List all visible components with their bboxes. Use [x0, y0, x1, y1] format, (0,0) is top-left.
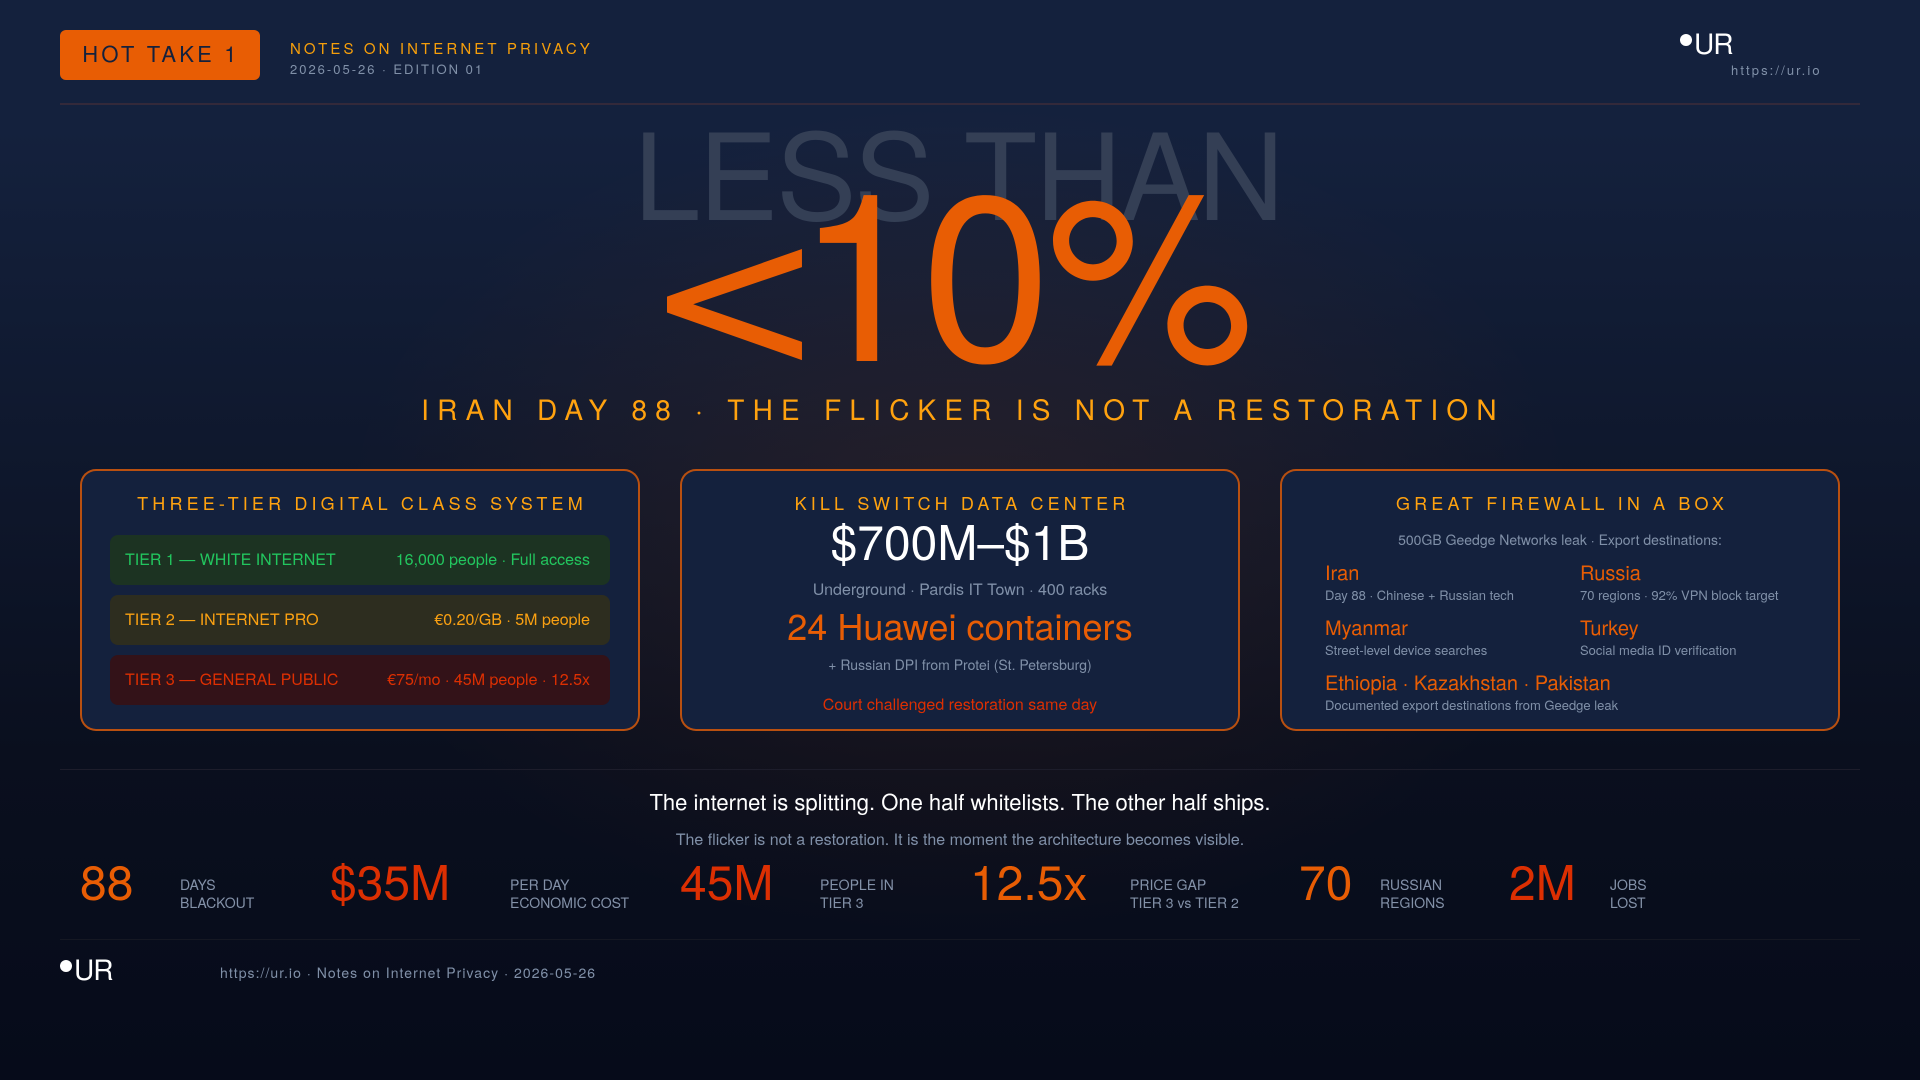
supporting line: The flicker is not a restoration. It is the moment the architecture becomes visible. [676, 827, 1244, 850]
turkey detail: Social media ID verification [1580, 640, 1737, 659]
russia detail: 70 regions · 92% VPN block target [1580, 585, 1778, 604]
country: russia: Russia [1580, 557, 1641, 586]
iran detail: Day 88 · Chinese + Russian tech [1325, 585, 1514, 604]
stat label: days blackout: DAYS [180, 874, 216, 894]
stat label: russian regions: RUSSIAN [1380, 874, 1442, 894]
hero subtitle: IRAN DAY 88 · THE FLICKER IS NOT A RESTORATION [421, 388, 1505, 428]
stat: 12.5x: 12.5x [970, 845, 1087, 914]
stat label: people in tier 3 [820, 874, 894, 912]
stat label: people in tier 3: TIER 3 [820, 892, 864, 912]
panel: three-tier digital class system [80, 469, 640, 731]
hot take badge [60, 30, 260, 80]
stat: 2M: 2M [1509, 845, 1576, 914]
country: turkey: Turkey [1580, 612, 1639, 641]
stat: $35M: $35M [330, 845, 450, 914]
tier 3 row: €75/mo · 45M people · 12.5x [387, 667, 590, 690]
stat label: price gap [1130, 874, 1239, 912]
panel heading: KILL SWITCH DATA CENTER [795, 490, 1129, 516]
export detail: Documented export destinations from Geedge leak [1325, 695, 1618, 714]
tier 1 row: 16,000 people · Full access [396, 547, 590, 570]
tier 3 row [110, 655, 610, 705]
tier 1 row [110, 535, 610, 585]
hero number: 10% [796, 92, 1249, 428]
footer text: https://ur.io · Notes on Internet Privacy · 2026-05-26 [220, 962, 596, 982]
russian dpi note: + Russian DPI from Protei (St. Petersburg) [828, 654, 1092, 674]
tier 2 row [110, 595, 610, 645]
stat label: people in tier 3: PEOPLE IN [820, 874, 894, 894]
stat label: russian regions [1380, 874, 1445, 912]
panel heading: THREE-TIER DIGITAL CLASS SYSTEM [137, 490, 587, 516]
stat label: economic cost: ECONOMIC COST [510, 892, 629, 912]
hero kicker: less than: LESS THAN [634, 83, 1282, 255]
series title: NOTES ON INTERNET PRIVACY [290, 38, 593, 59]
country: myanmar: Myanmar [1325, 612, 1408, 641]
leak intro: 500GB Geedge Networks leak · Export destinations: [1398, 529, 1722, 549]
stat label: days blackout [180, 874, 254, 912]
stat label: jobs lost: LOST [1610, 892, 1646, 912]
country: iran: Iran [1325, 557, 1359, 586]
stat: 70: 70 [1299, 845, 1352, 914]
stat label: russian regions: REGIONS [1380, 892, 1445, 912]
tier 2 row: TIER 2 — INTERNET PRO [125, 607, 319, 630]
panel: kill switch data center [680, 469, 1240, 731]
date and edition: 2026-05-26 · EDITION 01 [290, 59, 484, 78]
logo: footer: UR [74, 948, 112, 988]
countries: ethiopia kazakhstan pakistan: Ethiopia · Kazakhstan · Pakistan [1325, 667, 1611, 696]
stat label: price gap: TIER 3 vs TIER 2 [1130, 892, 1239, 912]
stat label: price gap: PRICE GAP [1130, 874, 1206, 894]
stat label: days blackout: BLACKOUT [180, 892, 254, 912]
panel: great firewall in a box [1280, 469, 1840, 731]
stat label: economic cost: PER DAY [510, 874, 570, 894]
container count: 24 Huawei containers [787, 600, 1133, 651]
tier 3 row: TIER 3 — GENERAL PUBLIC [125, 667, 338, 690]
cost range: $700M–$1B [831, 505, 1089, 574]
stat label: jobs lost [1610, 874, 1647, 912]
stat label: jobs lost: JOBS [1610, 874, 1647, 894]
hot take badge: HOT TAKE 1 [82, 38, 240, 69]
court note: Court challenged restoration same day [823, 692, 1097, 715]
tier 1 row: TIER 1 — WHITE INTERNET [125, 547, 336, 570]
tagline: The internet is splitting. One half whitelists. The other half ships. [649, 786, 1271, 817]
website url: https://ur.io [1731, 60, 1822, 79]
tier 2 row: €0.20/GB · 5M people [434, 607, 590, 630]
panel heading: GREAT FIREWALL IN A BOX [1396, 490, 1728, 516]
logo: top right: UR [1694, 22, 1732, 62]
myanmar detail: Street-level device searches [1325, 640, 1487, 659]
location details: Underground · Pardis IT Town · 400 racks [813, 577, 1107, 600]
hero number: < [655, 174, 816, 404]
stat: 45M: 45M [680, 845, 773, 914]
stat: 88 days: 88 [80, 845, 133, 914]
stat label: economic cost [510, 874, 629, 912]
